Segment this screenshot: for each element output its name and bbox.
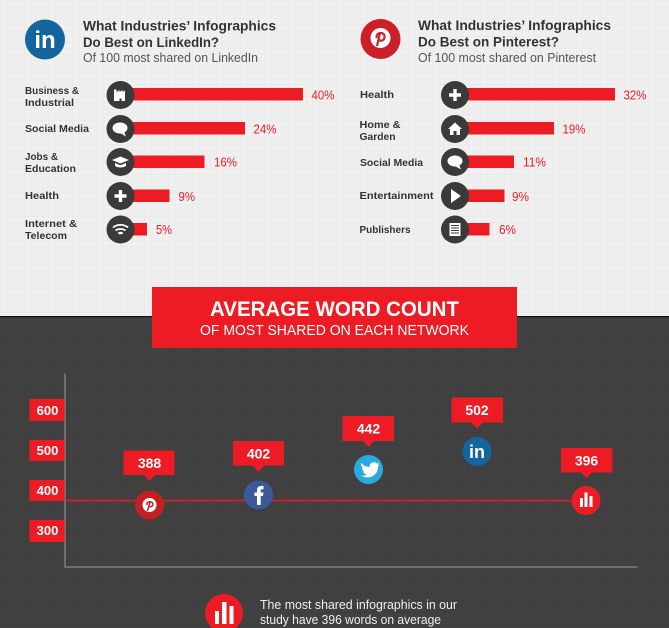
row: Business & Industrial 40%: [25, 81, 335, 109]
row: Social Media 24%: [25, 115, 277, 143]
point: Pinterest 388: [124, 450, 174, 520]
point: overall average 396: [561, 448, 612, 515]
row: Home & Garden 19%: 19%: [562, 122, 586, 136]
point: Pinterest 388: 388: [138, 455, 161, 471]
chart axes: [65, 374, 638, 567]
row: Jobs & Education 16%: Education: [25, 163, 76, 175]
row: Jobs & Education 16%: 16%: [214, 154, 237, 170]
y axis labels: 500: [37, 443, 58, 458]
y axis labels: 300: [37, 523, 58, 538]
row: Publishers 6%: 6%: [499, 222, 516, 237]
light background: [0, 0, 669, 317]
row: Publishers 6%: [360, 216, 516, 244]
row: Internet & Telecom 5%: [25, 216, 172, 244]
heading: LinkedIn: [83, 18, 276, 65]
row: Business & Industrial 40%: 40%: [312, 88, 335, 102]
row: Social Media 11%: Social Media: [360, 157, 423, 169]
icon: Pinterest: [360, 19, 400, 59]
row: Home & Garden 19%: [360, 115, 586, 143]
row: Business & Industrial 40%: Business &: [25, 85, 79, 97]
callout: 396 words on average: The most shared infographics in our: [260, 598, 457, 612]
point: LinkedIn 502: [452, 398, 503, 466]
panel: LinkedIn industries: [25, 18, 335, 244]
banner: average word count: OF MOST SHARED ON EACH NETWORK: [200, 322, 469, 339]
heading: Pinterest: [418, 17, 611, 65]
row: Social Media 24%: Social Media: [25, 123, 89, 135]
row: Entertainment 9%: [360, 182, 529, 210]
heading: LinkedIn: Of 100 most shared on LinkedIn: [83, 50, 258, 65]
row: Home & Garden 19%: Home &: [360, 119, 401, 131]
row: Health 32%: [360, 81, 647, 109]
heading: Pinterest: Do Best on Pinterest?: [418, 34, 559, 50]
heading: LinkedIn: Do Best on LinkedIn?: [83, 34, 219, 50]
point: Twitter 442: 442: [357, 420, 380, 436]
heading: Pinterest: What Industries’ Infographics: [418, 17, 611, 33]
average line: [66, 500, 576, 502]
callout: 396 words on average: study have 396 words on average: [260, 613, 441, 627]
row: Health 9%: Health: [25, 190, 59, 202]
callout: 396 words on average: [205, 594, 457, 628]
banner: average word count: AVERAGE WORD COUNT: [210, 298, 459, 321]
point: LinkedIn 502: 502: [465, 402, 489, 418]
row: Social Media 11%: 11%: [523, 154, 546, 170]
row: Internet & Telecom 5%: 5%: [156, 222, 172, 237]
section divider: [0, 316, 669, 317]
row: Home & Garden 19%: Garden: [360, 131, 396, 143]
row: Health 9%: 9%: [178, 189, 195, 204]
row: Internet & Telecom 5%: Telecom: [25, 230, 67, 242]
row: Jobs & Education 16%: [25, 148, 237, 176]
point: Facebook 402: [233, 441, 284, 510]
y axis labels: 400: [37, 483, 58, 498]
point: Facebook 402: 402: [247, 446, 270, 462]
point: LinkedIn 502: in: [469, 442, 485, 462]
icon: LinkedIn: [25, 20, 65, 60]
chart: word count by network: [30, 374, 638, 567]
dark background: [0, 317, 669, 628]
row: Publishers 6%: Publishers: [360, 224, 411, 236]
row: Internet & Telecom 5%: Internet &: [25, 218, 77, 230]
point: Twitter 442: [342, 416, 394, 484]
y axis labels: 600: [37, 403, 58, 418]
banner: average word count: [152, 287, 517, 348]
point: overall average 396: 396: [575, 452, 598, 468]
row: Entertainment 9%: 9%: [512, 189, 529, 204]
icon: LinkedIn: in: [34, 27, 56, 54]
row: Business & Industrial 40%: Industrial: [25, 97, 74, 109]
row: Health 32%: 32%: [624, 88, 647, 102]
heading: LinkedIn: What Industries’ Infographics: [83, 18, 276, 34]
row: Health 32%: Health: [360, 89, 394, 101]
row: Entertainment 9%: Entertainment: [360, 190, 434, 202]
row: Jobs & Education 16%: Jobs &: [25, 151, 58, 163]
panel: Pinterest industries: [360, 17, 647, 244]
row: Social Media 11%: [360, 148, 546, 176]
heading: Pinterest: Of 100 most shared on Pinterest: [418, 50, 596, 65]
row: Social Media 24%: 24%: [254, 122, 277, 136]
y axis labels: [30, 399, 64, 542]
row: Health 9%: [25, 182, 195, 210]
